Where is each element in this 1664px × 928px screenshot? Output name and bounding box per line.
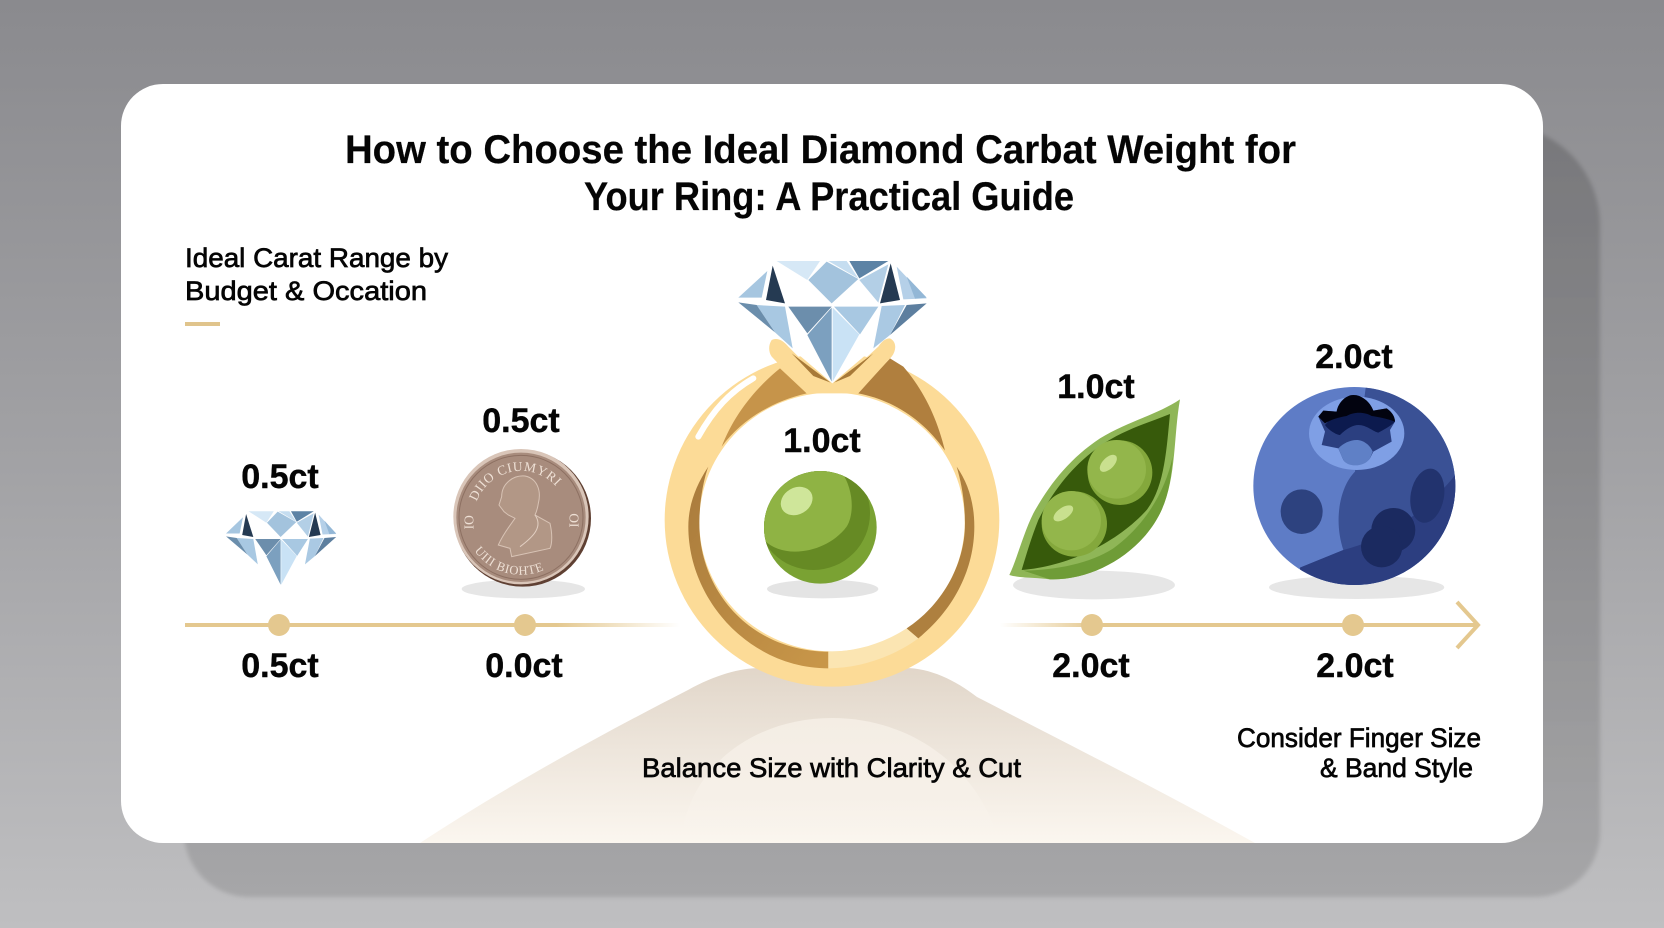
pedestal hill [420,668,1255,843]
bottom scale labels: 2.0ct [1052,647,1130,685]
prongs [769,338,895,393]
icon: coin: UIII BIOHTE [476,546,544,575]
subtitle: ideal carat range [185,243,449,326]
icon: coin [453,449,591,598]
icon: engagement ring [665,261,999,687]
icon: small diamond [226,511,336,586]
subtitle: ideal carat range: Ideal Carat Range by [185,243,449,273]
label: 1.0ct center: 1.0ct [783,422,861,460]
title: How to Choose the Ideal Diamond Carbat Weight for [345,128,1296,172]
icon: blueberry [1253,387,1456,599]
icon: coin: IO [461,515,476,529]
bottom scale labels: 0.5ct [241,647,319,685]
timeline arrow [185,602,1478,648]
bottom scale labels: 2.0ct [1316,647,1394,685]
title: Your Ring: A Practical Guide [584,175,1074,219]
label: 0.5ct coin: 0.5ct [482,402,560,440]
label: 2.0ct blueberry: 2.0ct [1315,338,1393,376]
caption: finger size [1237,723,1481,783]
caption: balance size: Balance Size with Clarity & Cut [642,753,1021,783]
label: 0.5ct diamond: 0.5ct [241,458,319,496]
bottom scale labels: 0.0ct [485,647,563,685]
subtitle: ideal carat range: Budget & Occation [185,276,427,306]
bottom scale labels [241,647,1394,685]
icon: coin: OI [566,513,581,527]
title [345,128,1296,219]
card shadow [184,125,1600,897]
large diamond [738,261,927,383]
caption: finger size: Consider Finger Size [1237,723,1481,753]
white card panel [121,84,1543,843]
ring band [665,353,999,687]
label: 1.0ct pod: 1.0ct [1057,368,1135,406]
icon: pea [764,471,878,598]
icon: pea pod [1009,399,1180,599]
caption: finger size: & Band Style [1320,753,1473,783]
icon: coin: DIIO CIUMYRI [468,462,562,502]
